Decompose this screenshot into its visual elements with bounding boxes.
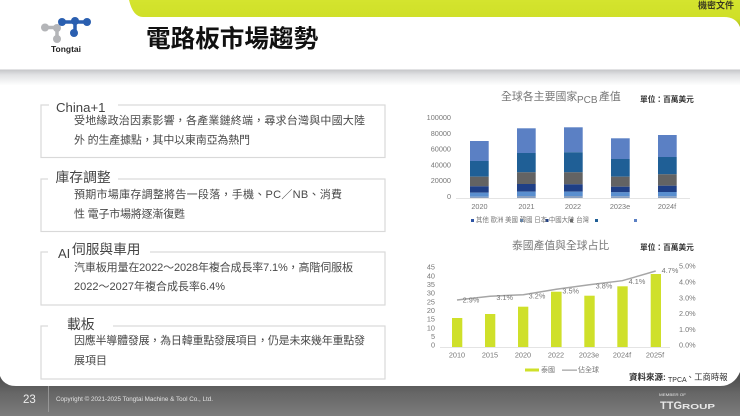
y axis: 20000	[431, 176, 451, 185]
bars 2021	[517, 128, 536, 198]
chart title	[501, 89, 621, 106]
heading: substrate: 載板	[67, 317, 95, 332]
right axis	[679, 262, 696, 350]
text: substrate body: 展項目	[74, 354, 107, 367]
x axis: 2021	[518, 202, 535, 211]
y axis: 0	[447, 192, 451, 201]
logo: TTGroup: TTG	[660, 400, 682, 412]
text: inventory body	[74, 187, 342, 220]
page number: 23	[23, 394, 36, 406]
panel: AI servers and automotive	[41, 242, 385, 305]
bars 2024f	[658, 135, 677, 198]
source note: 資料來源:	[629, 372, 666, 382]
x axis: 2020	[515, 351, 531, 360]
line: global share	[457, 271, 656, 300]
data labels	[463, 266, 679, 304]
right axis: 2.0%	[679, 309, 696, 318]
y axis: 60000	[431, 145, 451, 154]
logo: TTGroup	[659, 392, 715, 412]
text: AI servers body	[74, 260, 353, 293]
text: substrate body	[74, 333, 365, 367]
x axis: 2020	[471, 202, 488, 211]
bars: Thailand	[452, 274, 661, 347]
logo: Tongtai: Tongtai	[51, 44, 81, 54]
bars 2023e	[611, 138, 630, 198]
left axis: 45	[427, 263, 435, 272]
y axis: 80000	[431, 129, 451, 138]
text: AI servers body: 汽車板用量在2022～2028年複合成長率7.1%，高階伺服板	[74, 260, 353, 274]
heading: AI servers and automotive	[58, 242, 140, 261]
left axis: 5	[431, 332, 435, 341]
right axis: 0.0%	[679, 341, 696, 350]
unit label: 單位：百萬美元	[640, 94, 694, 104]
x axis: 2023e	[610, 202, 630, 211]
panel: inventory adjustment	[41, 170, 385, 232]
x axis	[471, 202, 677, 211]
chart title: 泰國產值與全球占比	[512, 238, 609, 252]
left axis: 25	[427, 297, 435, 306]
panel: substrate	[41, 317, 385, 379]
logo: Tongtai	[41, 17, 91, 54]
x axis: 2022	[565, 202, 581, 211]
top lime banner	[129, 0, 740, 27]
logo: TTGroup: MEMBER OF	[659, 392, 687, 397]
y axis: 100000	[427, 113, 451, 122]
copyright: Copyright © 2021-2025 Tongtai Machine & Tool Co., Ltd.	[56, 396, 213, 403]
left axis: 0	[431, 341, 435, 350]
header shadow band	[0, 70, 740, 86]
left axis: 20	[427, 306, 435, 315]
left axis: 15	[427, 315, 435, 324]
text: China+1 body: 受地緣政治因素影響，各產業鏈終端，尋求台灣與中國大陸	[74, 113, 365, 127]
chart: global PCB output by country	[427, 89, 694, 224]
x axis: 2023e	[579, 351, 599, 360]
text: substrate body: 因應半導體發展，為日韓重點發展項目，仍是未來幾年重點發	[74, 333, 365, 347]
text: China+1 body	[74, 113, 365, 146]
legend: 泰國	[541, 365, 555, 374]
y axis	[427, 113, 451, 201]
text: China+1 body: 外 的生產據點，其中以東南亞為熱門	[74, 132, 250, 146]
data labels: 3.8%	[596, 281, 613, 290]
heading: inventory adjustment: 庫存調整	[56, 170, 111, 185]
data labels: 4.7%	[662, 266, 679, 275]
x axis: 2024f	[658, 202, 677, 211]
source note	[629, 372, 728, 384]
left axis: 10	[427, 323, 435, 332]
source note: TPCA	[668, 377, 687, 384]
panel: China+1	[41, 100, 385, 158]
title: 電路板市場趨勢	[146, 25, 319, 53]
data labels: 2.9%	[463, 296, 480, 304]
data labels: 3.1%	[496, 293, 514, 302]
legend: 佔全球	[578, 365, 599, 374]
heading: China+1: China+1	[56, 100, 106, 115]
left axis: 35	[427, 280, 435, 289]
x axis: 2025f	[646, 351, 665, 360]
chart: Thailand output and global share	[427, 238, 696, 374]
left axis: 30	[427, 289, 435, 298]
chart title: PCB	[577, 95, 598, 106]
data labels: 3.2%	[529, 291, 546, 300]
chart title: 產值	[599, 89, 621, 103]
data labels: 4.1%	[629, 277, 646, 286]
confidential tag: 機密文件	[698, 0, 734, 10]
x axis: 2010	[449, 351, 465, 360]
legend: 其他 歐洲 美國 韓國 日本 中國大陸 台灣	[476, 215, 589, 224]
logo: TTGroup: ROUP	[682, 402, 715, 411]
bars 2022	[564, 127, 583, 198]
heading: AI servers and automotive: AI	[58, 246, 70, 261]
right axis: 1.0%	[679, 325, 696, 334]
x axis: 2022	[548, 351, 564, 360]
right axis: 4.0%	[679, 278, 696, 286]
chart title: 全球各主要國家	[501, 89, 577, 103]
bars 2020	[470, 141, 489, 198]
right axis: 5.0%	[679, 262, 696, 271]
x axis	[449, 351, 665, 360]
legend	[471, 215, 637, 224]
left axis: 40	[427, 271, 435, 280]
heading: AI servers and automotive: 伺服與車用	[72, 242, 140, 257]
source note: 、工商時報	[686, 372, 728, 382]
data labels: 3.5%	[562, 286, 580, 295]
text: AI servers body: 2022～2027年複合成長率6.4%	[74, 279, 225, 293]
x axis: 2024f	[613, 351, 632, 360]
right axis: 3.0%	[679, 293, 696, 302]
footer band	[0, 370, 740, 416]
left axis	[427, 263, 435, 350]
unit label: 單位：百萬美元	[640, 242, 694, 252]
text: inventory body: 預期市場庫存調整將告一段落，手機、PC／NB、消費	[74, 187, 342, 201]
text: inventory body: 性 電子市場將逐漸復甦	[74, 206, 185, 220]
legend	[525, 365, 599, 374]
x axis: 2015	[482, 351, 498, 360]
y axis: 40000	[431, 160, 451, 170]
